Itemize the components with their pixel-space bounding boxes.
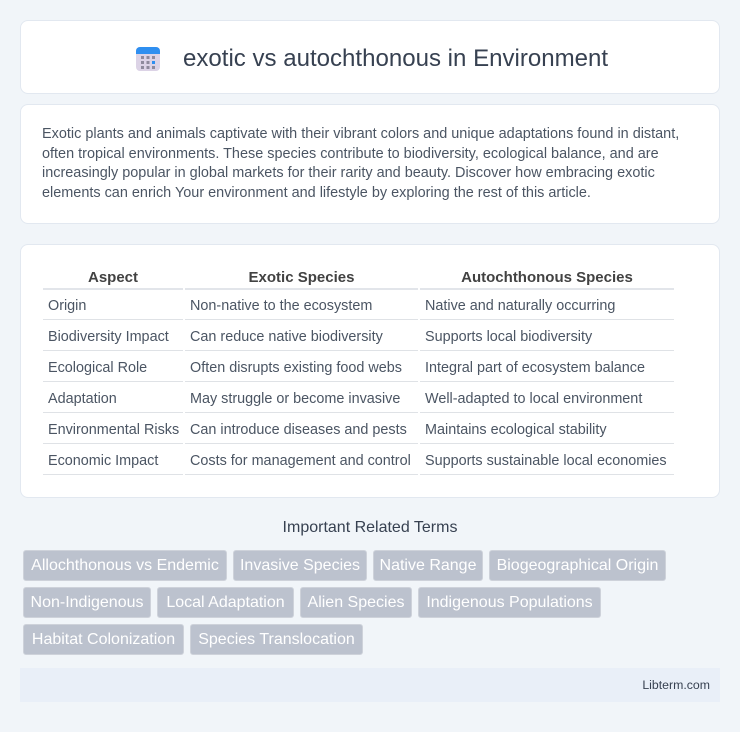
table card: [20, 244, 720, 498]
comparison table: Well-adapted to local environment: [425, 391, 642, 407]
comparison table: Costs for management and control: [190, 453, 411, 469]
intro card: [20, 104, 720, 224]
comparison table: Exotic Species: [249, 269, 354, 286]
related term tags: Biogeographical Origin: [497, 557, 658, 574]
comparison table: Aspect: [88, 269, 138, 286]
footer: [20, 668, 720, 702]
comparison table: Supports local biodiversity: [425, 329, 592, 345]
comparison table: Supports sustainable local economies: [425, 453, 667, 469]
related term tags: Native Range: [380, 557, 476, 574]
intro text: Exotic plants and animals captivate with their vibrant colors and unique adaptations found in distant,: [42, 126, 679, 142]
icon: calendar: [136, 47, 160, 71]
related term tags: Species Translocation: [198, 631, 355, 648]
header card: [20, 20, 720, 94]
comparison table: Can introduce diseases and pests: [190, 422, 407, 438]
related term tags: Invasive Species: [240, 557, 360, 574]
comparison table: Can reduce native biodiversity: [190, 329, 383, 345]
footer brand: Libterm.com: [642, 678, 710, 692]
comparison table: Ecological Role: [48, 360, 147, 376]
intro text: elements can enrich Your environment and lifestyle by exploring the rest of this article.: [42, 185, 591, 201]
comparison table: Adaptation: [48, 391, 117, 407]
comparison table: Native and naturally occurring: [425, 298, 615, 314]
comparison table: Environmental Risks: [48, 422, 179, 438]
related term tags: Indigenous Populations: [426, 594, 593, 611]
intro text: often tropical environments. These species contribute to biodiversity, ecological balance, and are: [42, 146, 659, 162]
related term tags: Non-Indigenous: [31, 594, 143, 611]
comparison table: Economic Impact: [48, 453, 158, 469]
intro text: increasingly popular in global markets for their rarity and beauty. Discover how embracing exotic: [42, 165, 655, 181]
related term tags: Local Adaptation: [166, 594, 285, 611]
title: exotic vs autochthonous in Environment: [183, 45, 608, 72]
comparison table: Biodiversity Impact: [48, 329, 169, 345]
comparison table: Often disrupts existing food webs: [190, 360, 402, 376]
intro text: [42, 126, 679, 201]
comparison table: Origin: [48, 298, 86, 314]
comparison table: Integral part of ecosystem balance: [425, 360, 645, 376]
related term tags: Allochthonous vs Endemic: [31, 557, 219, 574]
related term tags: Habitat Colonization: [32, 631, 175, 648]
comparison table: Non-native to the ecosystem: [190, 298, 372, 314]
related terms heading: Important Related Terms: [283, 519, 457, 536]
comparison table: Maintains ecological stability: [425, 422, 607, 438]
comparison table: May struggle or become invasive: [190, 391, 400, 407]
comparison table: Autochthonous Species: [461, 269, 633, 286]
related term tags: Alien Species: [308, 594, 404, 611]
